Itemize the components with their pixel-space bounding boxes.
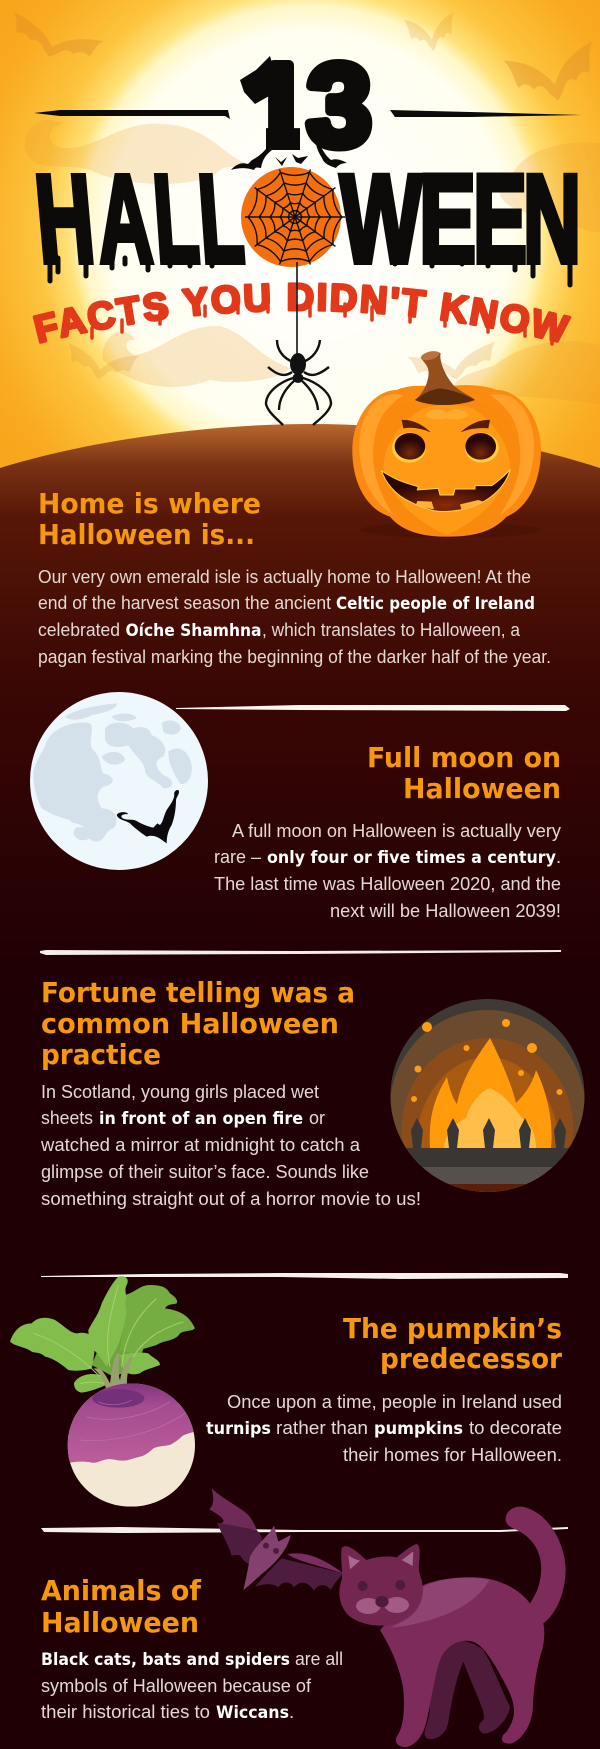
sky background bbox=[0, 0, 600, 480]
subtitle: facts you didn't know: FACTS YOU DIDN'T KNOW bbox=[32, 282, 572, 344]
section 2 body text: . bbox=[556, 846, 561, 867]
section 5: animals of halloween bbox=[41, 1574, 343, 1723]
divider 4 bbox=[41, 1527, 568, 1533]
title: HALLOWEEN: E bbox=[473, 150, 527, 289]
section 3 heading: common Halloween bbox=[41, 1007, 339, 1040]
small bats under the 13 bbox=[231, 140, 347, 170]
title: HALLOWEEN bbox=[30, 149, 581, 289]
section 4 body text bbox=[206, 1391, 562, 1465]
title: HALLOWEEN: A bbox=[94, 149, 155, 289]
section 4 body text: to decorate bbox=[469, 1417, 562, 1438]
section 5 heading: Halloween bbox=[41, 1606, 199, 1639]
divider 1 bbox=[176, 705, 570, 711]
section 1 body text bbox=[38, 566, 551, 667]
section 4 body text: pumpkins bbox=[374, 1419, 463, 1439]
section 4 heading bbox=[343, 1312, 562, 1375]
section 1 body text: pagan festival marking the beginning of the darker half of the year. bbox=[38, 646, 551, 667]
flames bbox=[430, 1038, 552, 1148]
cat far legs bbox=[425, 1640, 510, 1739]
section 5 body text bbox=[41, 1648, 343, 1723]
section 3: fortune telling bbox=[40, 976, 421, 1209]
section 3 body text: glimpse of their suitor’s face. Sounds like bbox=[41, 1161, 369, 1182]
section 2 body text: only four or five times a century bbox=[267, 848, 556, 868]
cat body and tail bbox=[380, 1507, 566, 1747]
title: HALLOWEEN: E bbox=[419, 150, 476, 289]
section 5 body text: Wiccans bbox=[216, 1703, 289, 1723]
icon: bat on moon bbox=[117, 790, 179, 843]
section 4 body text: turnips bbox=[206, 1419, 271, 1439]
pumpkin stem bbox=[415, 352, 475, 405]
dark brown page body with hill bbox=[0, 424, 600, 1749]
section 3 body text: in front of an open fire bbox=[99, 1109, 303, 1129]
section 2 body text: The last time was Halloween 2020, and the bbox=[214, 873, 561, 894]
icon: fireplace bbox=[390, 999, 584, 1192]
icon: purple bat bbox=[209, 1488, 343, 1591]
divider 2 bbox=[40, 950, 561, 955]
section 4: the pumpkin's predecessor bbox=[206, 1312, 562, 1465]
section 5 body text: . bbox=[289, 1701, 294, 1722]
section 5 body text: symbols of Halloween because of bbox=[41, 1675, 312, 1696]
section 1 body text: celebrated bbox=[38, 619, 120, 640]
title: 13: 3 bbox=[307, 40, 372, 170]
section 1 heading: Home is where bbox=[38, 487, 261, 520]
section 5 heading: Animals of bbox=[41, 1574, 202, 1607]
section 1 body text: , which translates to Halloween, a bbox=[262, 619, 521, 640]
title: HALLOWEEN: L bbox=[149, 149, 203, 289]
spider on thread bbox=[266, 262, 331, 425]
section 2 body text: rare – bbox=[214, 846, 262, 867]
section 4 heading: predecessor bbox=[380, 1342, 562, 1375]
section 1 body text: Celtic people of Ireland bbox=[336, 594, 535, 614]
section 1 heading bbox=[38, 487, 261, 551]
section 4 body text: Once upon a time, people in Ireland used bbox=[227, 1391, 562, 1412]
embers bbox=[411, 1019, 562, 1102]
section 4 body text: their homes for Halloween. bbox=[343, 1444, 562, 1465]
pumpkin eyes bbox=[392, 433, 499, 463]
turnip leaves bbox=[10, 1276, 195, 1393]
section 3 body text: sheets bbox=[41, 1107, 93, 1128]
fire railings bbox=[411, 1118, 566, 1148]
section 5 body text: are all bbox=[295, 1648, 343, 1669]
section 1 body text: Our very own emerald isle is actually home to Halloween! At the bbox=[38, 566, 531, 587]
title: 13 bbox=[34, 40, 582, 170]
spider web circle bbox=[238, 161, 352, 273]
turnip root bbox=[65, 1382, 198, 1508]
section 1 body text: Oíche Shamhna bbox=[126, 621, 262, 641]
title: HALLOWEEN: H bbox=[30, 149, 99, 289]
background bats bbox=[4, 12, 600, 387]
section 3 body text: In Scotland, young girls placed wet bbox=[41, 1081, 319, 1102]
pumpkin bbox=[352, 349, 541, 538]
section 5 heading bbox=[41, 1574, 202, 1639]
section 1 body text: end of the harvest season the ancient bbox=[38, 592, 331, 613]
section 3 body text bbox=[40, 1081, 421, 1209]
section 2 heading: Halloween bbox=[403, 772, 561, 805]
section 2 heading bbox=[367, 741, 561, 805]
title drips bbox=[50, 258, 570, 285]
section 3 heading: practice bbox=[41, 1038, 161, 1071]
section 3 body text: or bbox=[309, 1107, 325, 1128]
pumpkin mouth bbox=[382, 470, 510, 512]
pumpkin brows bbox=[402, 420, 490, 432]
section 2 body text: A full moon on Halloween is actually very bbox=[232, 820, 562, 841]
title: HALLOWEEN: W bbox=[340, 150, 422, 289]
cat head bbox=[339, 1544, 422, 1626]
section 2 body text bbox=[214, 820, 562, 921]
section 5 body text: their historical ties to bbox=[41, 1701, 210, 1722]
section 3 body text: watched a mirror at midnight to catch a bbox=[40, 1134, 361, 1155]
section 3 heading: Fortune telling was a bbox=[41, 976, 355, 1009]
section 4 heading: The pumpkin’s bbox=[343, 1312, 562, 1345]
title: HALLOWEEN: L bbox=[194, 149, 248, 289]
section 4 body text: rather than bbox=[276, 1417, 368, 1438]
cat shoulder highlight bbox=[390, 1578, 489, 1628]
icon: turnip bbox=[10, 1276, 198, 1508]
section 3 body text: something straight out of a horror movie to us! bbox=[41, 1188, 421, 1209]
icon: full moon with bat bbox=[30, 692, 208, 870]
section 5 body text: Black cats, bats and spiders bbox=[41, 1650, 290, 1670]
section 2: full moon on halloween bbox=[214, 741, 562, 921]
section 2 body text: next will be Halloween 2039! bbox=[330, 900, 561, 921]
divider 3 bbox=[41, 1273, 568, 1279]
title: 13: 1 bbox=[246, 40, 311, 170]
section 2 heading: Full moon on bbox=[367, 741, 561, 774]
section 3 heading bbox=[41, 976, 355, 1071]
background clouds bbox=[25, 120, 600, 405]
section 1 heading: Halloween is... bbox=[38, 518, 255, 551]
section 1: home is where halloween is bbox=[38, 487, 551, 667]
icon: purple cat bbox=[339, 1507, 566, 1747]
